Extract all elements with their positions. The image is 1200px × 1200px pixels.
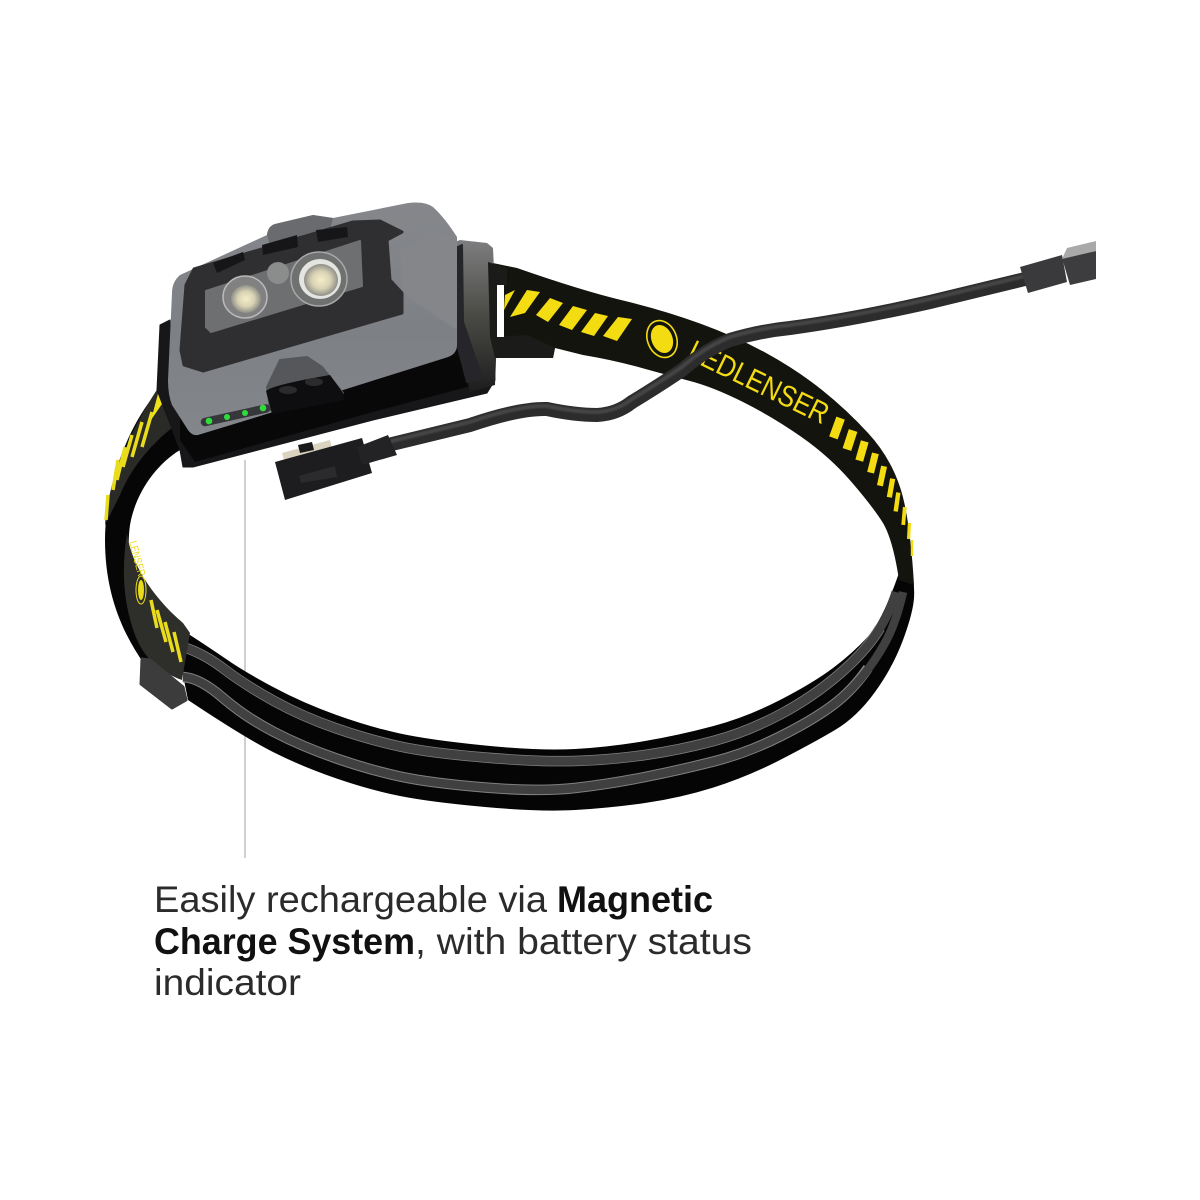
hazard dashes on right strap — [829, 417, 913, 556]
tip of left hazard stripe — [151, 390, 162, 420]
leader line — [244, 460, 246, 858]
caption text: , with battery status — [415, 920, 752, 962]
left LED — [223, 276, 267, 318]
rear housing — [157, 242, 495, 467]
headband: upper right strap — [488, 262, 914, 585]
headband: lower double-strap section — [176, 560, 914, 811]
hazard stripes near lamp — [504, 290, 632, 341]
strap stripe two — [183, 592, 903, 790]
dark lens surround — [181, 221, 402, 371]
caption text: Charge System — [154, 920, 415, 962]
headband: left strap — [105, 385, 190, 708]
caption text — [154, 878, 752, 1003]
top vents — [213, 227, 348, 273]
caption text: Easily rechargeable via — [154, 878, 547, 920]
bottom dark strip — [180, 340, 475, 462]
right bracket — [445, 240, 555, 392]
headlamp — [157, 202, 555, 467]
strap buckle clip — [141, 659, 186, 708]
left hazard stripes — [106, 412, 181, 662]
right LED — [291, 252, 347, 306]
sensor dot — [267, 262, 289, 284]
caption text: indicator — [154, 961, 301, 1003]
left wordmark: LENSER — [126, 540, 147, 578]
lens window — [206, 241, 362, 332]
USB plug end — [1020, 241, 1096, 293]
magnetic connector — [275, 435, 397, 500]
brand wordmark: LEDLENSER — [683, 335, 834, 431]
charging cable — [392, 276, 1025, 444]
battery status LED strip — [205, 405, 266, 424]
caption text: Magnetic — [557, 878, 713, 920]
left logo ring — [136, 576, 146, 604]
main grey body — [168, 202, 457, 435]
strap stripe one — [183, 592, 896, 761]
brand logo ring — [641, 316, 683, 362]
top right facet — [400, 233, 457, 330]
top button — [267, 215, 333, 245]
mode button — [266, 357, 345, 414]
